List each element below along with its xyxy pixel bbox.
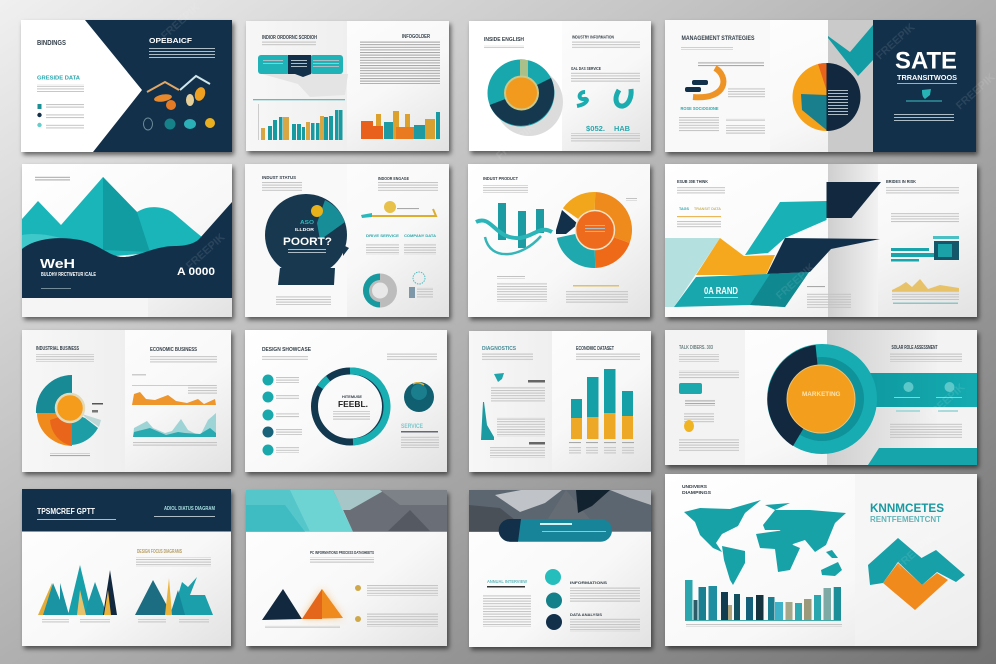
teal band xyxy=(868,373,977,407)
orange and pale chart lines xyxy=(147,76,210,92)
teal labels: HAB xyxy=(614,126,630,133)
band icons xyxy=(894,382,962,398)
heading: gresde data: GRESIDE DATA xyxy=(37,76,80,82)
label: number: A 0000 xyxy=(177,266,215,278)
panel: circle feature spread xyxy=(665,330,977,465)
panel: ring chart spread xyxy=(245,330,447,472)
circle diagram xyxy=(767,344,877,454)
text right xyxy=(570,580,640,632)
bar chart xyxy=(685,580,842,627)
panel: world map spread: DIAMPINGS xyxy=(682,490,711,495)
gold dots with text xyxy=(355,584,438,627)
teal pill icon xyxy=(679,383,702,394)
left heading: TALK DIBERS. 303 xyxy=(679,345,713,351)
band captions xyxy=(890,410,962,438)
orange curve icon xyxy=(685,61,764,97)
small teal icon xyxy=(494,373,504,382)
ring chart xyxy=(314,371,387,442)
head silhouette xyxy=(265,194,349,285)
grey header facets xyxy=(333,490,447,532)
pie chart xyxy=(793,63,861,131)
list icons xyxy=(262,374,302,456)
right heading: ECONOMIC DATASET xyxy=(576,346,614,352)
dark arrow shape xyxy=(85,20,232,152)
watermark: FREEPIK xyxy=(874,21,917,62)
panel: ring chart spread: FEEBL. xyxy=(338,399,368,409)
teal columns: DRIVE SERVICE xyxy=(366,233,399,238)
text block xyxy=(807,286,851,308)
panel: diagonal shapes spread: TAGS xyxy=(679,206,689,211)
donut icon xyxy=(363,274,397,308)
mountain chart right xyxy=(135,577,213,615)
teal labels xyxy=(586,126,630,133)
watermark: FREEPIK xyxy=(774,261,817,302)
left heading: DIAGNOSTICS xyxy=(482,346,517,352)
panel: business cover spread xyxy=(21,20,232,152)
heading: PC INFORMATIONS PROCESS DATASHEETS xyxy=(310,550,374,555)
subtitle: BULDHV RRCTWETUR ICALE xyxy=(41,272,97,278)
text right: INFORMATIONS xyxy=(570,580,607,585)
watermark: FREEPIK xyxy=(494,121,537,162)
subtitle: RENTFEMENTCNT xyxy=(870,515,941,524)
panel: mountain cover xyxy=(22,164,232,317)
right heading: ECONOMIC BUSINESS xyxy=(150,347,198,353)
ring title: HITEMUSE xyxy=(342,394,362,399)
stacked bar chart xyxy=(571,369,633,439)
title: SATE xyxy=(895,48,957,74)
orange blobs xyxy=(154,86,207,110)
callout banner xyxy=(258,55,348,97)
right heading: SOLAR ROLE ASSESSMENT xyxy=(892,345,938,351)
teal header xyxy=(246,490,353,532)
subheading: GAL DAS SERVICE xyxy=(571,66,601,71)
panel: head spread xyxy=(245,164,449,317)
subtitle: TRRANSITWOOS xyxy=(897,75,957,82)
captions xyxy=(42,619,209,624)
icon: leaf xyxy=(922,89,931,99)
mountain logo xyxy=(868,538,965,610)
watermark: FREEPIK xyxy=(894,531,937,572)
panel: stacked bars spread xyxy=(469,331,651,472)
pie labels xyxy=(50,403,103,456)
text block xyxy=(360,41,440,84)
text blocks xyxy=(490,380,545,458)
gold area chart xyxy=(892,279,959,304)
watermark: FREEPIK xyxy=(924,381,967,422)
teal label: ROSE SOCIOGIONE xyxy=(680,106,718,111)
panel: diagonal shapes spread xyxy=(665,164,977,317)
right heading: BRIDES IN RISK xyxy=(886,179,917,184)
heading: INSIDE ENGLISH xyxy=(484,37,524,43)
pie chart xyxy=(556,192,632,268)
teal shape main xyxy=(745,201,826,255)
bar chart xyxy=(253,99,345,140)
text right: DATA ANALYSIS xyxy=(570,612,602,617)
donut chart xyxy=(488,60,563,136)
teal labels: $052. xyxy=(586,126,605,133)
title: WeH xyxy=(40,256,75,271)
mountain header xyxy=(469,490,651,532)
left heading: INDIOR ORDORNC SCRDIOH xyxy=(262,35,317,41)
watermark: FREEPIK xyxy=(159,1,202,42)
mini icon xyxy=(409,272,433,298)
world map xyxy=(684,500,846,585)
left heading: INDUSTRIAL BUSINESS xyxy=(36,346,79,352)
bar captions xyxy=(569,442,634,455)
heading: MANAGEMENT STRATEGIES xyxy=(682,36,754,42)
triangle chart xyxy=(262,589,343,629)
heading: INDUST PRODUCT xyxy=(483,176,518,181)
block chart xyxy=(361,111,440,139)
dark shape lower xyxy=(767,238,880,274)
teal area chart xyxy=(133,413,217,446)
heading: DESIGN SHOWCASE xyxy=(262,347,311,353)
mini bars xyxy=(891,236,959,262)
orange area chart xyxy=(132,374,217,405)
teal bars and wave xyxy=(476,203,552,254)
gold heading: DESIGN FOCUS DIAGRAMS xyxy=(137,549,182,555)
title: KNNMCETES xyxy=(870,501,944,515)
teal check mark xyxy=(828,25,873,76)
intro text xyxy=(35,176,70,181)
bottom teal band xyxy=(868,448,977,465)
circle icons xyxy=(545,569,562,630)
band label: 0A RAND xyxy=(704,286,738,297)
panel: mountains with dark header xyxy=(22,489,231,646)
panel: orange pie spread xyxy=(468,164,650,317)
panel: donut spread xyxy=(469,21,651,151)
panel: sate cover spread xyxy=(665,20,976,152)
pie chart xyxy=(36,375,101,446)
bottom icons xyxy=(144,118,215,130)
header title: TPSMCREF GPTT xyxy=(37,507,95,516)
head title: POORT? xyxy=(283,236,332,248)
orange peak xyxy=(696,238,775,275)
head silhouette: ILLDOR xyxy=(295,227,315,232)
panel: triangles spread xyxy=(246,490,447,646)
teal mountains xyxy=(22,177,206,262)
header right text: ADIOL DIATUS DIAGRAM xyxy=(164,506,215,512)
circle title: MARKETING xyxy=(802,391,840,398)
text block xyxy=(571,133,640,143)
teal label: SERVICE xyxy=(401,424,423,430)
small heading: UNDIVERS xyxy=(682,484,707,489)
panel: pie and area spread xyxy=(22,330,231,472)
heading right: INDOOR ENGAGE xyxy=(378,176,409,181)
right heading: INFOGOLDER xyxy=(402,34,430,40)
head silhouette: ASO xyxy=(300,220,314,226)
heading: INDUST STATUS xyxy=(262,175,296,180)
panel: grey mountains spread xyxy=(469,490,651,647)
text block white xyxy=(149,48,215,59)
left heading: ESUB 30E THINK xyxy=(677,179,709,184)
icon list xyxy=(37,104,84,129)
heading right: INDUSTRY INFORMATION xyxy=(572,34,614,40)
teal columns xyxy=(366,233,436,255)
label xyxy=(626,198,637,200)
dark wave xyxy=(22,202,232,298)
gold line with coin xyxy=(361,201,436,218)
heading: operations: OPEBAICF xyxy=(149,36,192,45)
heading: bindings: BINDINGS xyxy=(37,40,66,47)
teal heading: ANNUAL INTERVIEW xyxy=(487,579,528,584)
watermark: FREEPIK xyxy=(184,231,227,272)
dark shape top xyxy=(826,182,881,218)
text blocks xyxy=(679,354,739,452)
panel: chart spread xyxy=(246,21,449,151)
light teal block xyxy=(665,238,720,307)
teal glyph icons xyxy=(577,89,631,106)
teal columns: COMPANY DATA xyxy=(404,233,436,238)
gold blob icon xyxy=(684,420,694,432)
text block xyxy=(37,84,84,92)
text blocks xyxy=(497,276,628,304)
panel: world map spread xyxy=(665,474,977,646)
lower teal band xyxy=(674,272,809,307)
dark circle icon xyxy=(404,382,434,412)
text block xyxy=(894,112,954,123)
pill banner xyxy=(499,519,612,542)
panel: diagonal shapes spread: TRANSIT DATA xyxy=(694,206,721,211)
watermark xyxy=(159,1,996,572)
teal spike xyxy=(481,402,494,440)
mountain chart left xyxy=(38,565,117,615)
